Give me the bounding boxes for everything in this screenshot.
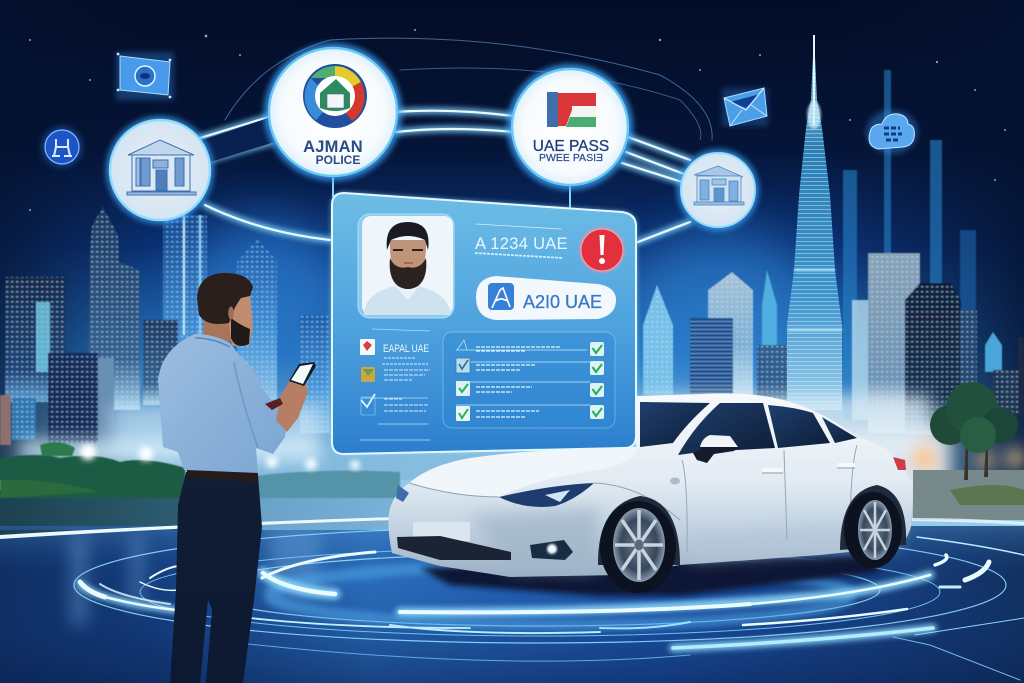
water strip [0,490,395,530]
tower: Burj Khalifa [787,35,842,410]
ground [0,518,1024,683]
light haze at horizon [20,395,1024,500]
stars [29,29,1006,211]
trousers [170,472,262,683]
phone case [265,398,283,410]
circle: UAE Pass [507,64,633,190]
list: checklist [443,332,615,428]
left skyline [0,207,330,445]
connector lines [200,38,712,242]
front wheel [600,501,676,593]
bumper shading [470,508,900,570]
shirt [158,334,287,474]
windshield [640,402,710,447]
pill: A210 UAE: A2I0 UAE [523,292,602,312]
background: dark edges [0,0,1024,480]
body [388,393,913,577]
circle: Ajman Police: POLICE [316,153,360,167]
foglight [530,540,573,560]
connector block [197,118,275,164]
circle: UAE Pass: PWEE PASIƎ [539,152,603,164]
check: row icons left [456,358,470,421]
crease [409,483,680,520]
icon: building [127,140,196,195]
circle: Ajman Police [264,43,402,181]
icon: camera tile [116,52,174,100]
icon: mail tile [722,88,768,126]
list: left column [360,329,430,440]
icon: UAE flag [547,92,596,127]
icon: round badge [41,126,83,168]
glowing rings on the ground [74,527,1024,680]
text: UAE Pass: UAE PASS [533,138,609,155]
door lines and handles [682,445,857,552]
panel: vehicle record [332,193,636,454]
grille [397,536,511,560]
trees: left shoreline [0,442,400,498]
text: plate number [475,224,568,258]
rear wheel [844,492,902,568]
pill: A210 UAE [476,276,616,320]
list: left column: EAPAL UAE [383,343,429,355]
tail light [893,457,906,470]
horizon light line [0,517,1024,539]
plate [413,522,470,541]
text: Ajman Police: AJMAN [303,138,363,156]
tree: right [930,382,1018,480]
background: city glow [185,220,810,370]
circle: government building left [106,116,214,224]
emblem: police crest [303,64,367,128]
headlight [499,483,594,507]
belt [187,470,258,483]
right lawn [913,470,1024,520]
icon: building [694,166,744,205]
icon: cloud [866,110,918,154]
forearm and hand [276,380,308,432]
text: plate number: A 1234 UAE [475,235,568,253]
mirror [693,435,738,463]
side windows [678,403,857,455]
phone [289,362,316,386]
car [388,393,913,596]
hood highlight [409,447,636,497]
photo: driver portrait [358,214,454,318]
circle: government building right [677,149,759,231]
neck and head [197,273,253,346]
right skyline [643,70,1024,435]
car shadow [420,555,880,596]
icon: alert [579,227,625,273]
arches [598,496,680,565]
check: row icons right [590,342,604,419]
man with phone [158,273,316,683]
